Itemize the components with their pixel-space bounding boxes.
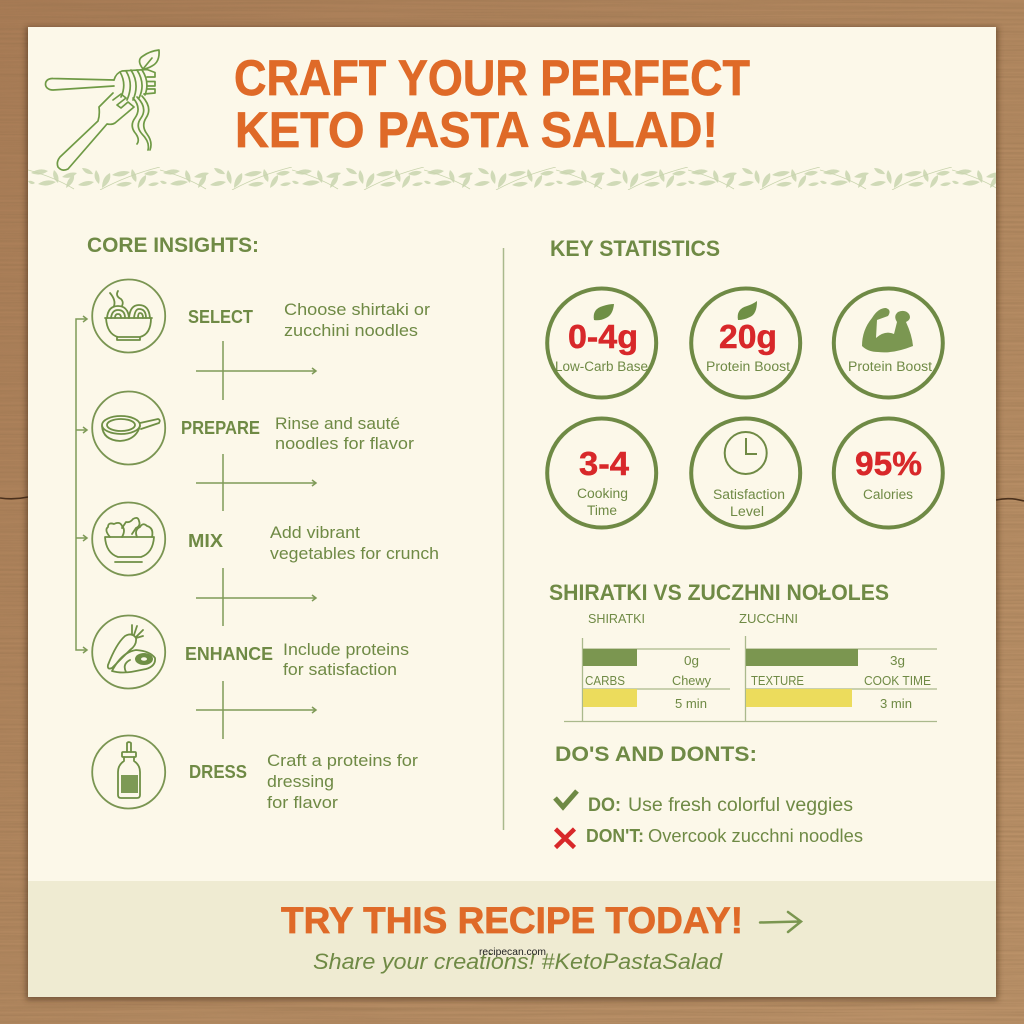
icon: noodle bowl — [92, 280, 165, 352]
icon: frying pan — [92, 392, 165, 464]
flow bracket with arrows — [76, 316, 87, 653]
stat: satisfaction level — [691, 418, 800, 528]
stat: low-carb base — [547, 288, 656, 398]
watermark: recipecan.com — [479, 947, 546, 958]
leaf pattern band — [28, 167, 996, 190]
description: dress — [267, 751, 418, 812]
icon: check — [555, 791, 577, 807]
comparison chart: CARBS — [585, 673, 625, 688]
icon: flexed arm — [862, 308, 913, 352]
icon: carrot and protein — [92, 616, 165, 688]
stat: low-carb base: 0-4g — [568, 318, 638, 355]
connector 3 — [196, 568, 316, 626]
title — [234, 50, 750, 158]
label: mix: MIX — [188, 531, 223, 551]
label: enhance: ENHANCE — [185, 644, 273, 664]
description: select — [284, 300, 430, 340]
label: prepare: PREPARE — [181, 418, 260, 438]
step: mix — [92, 502, 439, 576]
connector 2 — [196, 454, 316, 511]
stat: calories — [834, 418, 943, 528]
description: enhance: Include proteins — [283, 640, 409, 659]
comparison chart: 3g — [890, 653, 905, 668]
stat: protein boost muscle — [834, 288, 943, 398]
icon: leaf — [594, 304, 614, 320]
icon: dressing bottle — [92, 736, 165, 808]
comparison chart: 0g — [684, 653, 699, 668]
do item: DO: — [588, 795, 621, 816]
heading: dos and donts: DO'S AND DONTS: — [555, 743, 757, 766]
heading: noodle comparison: SHIRATKI VS ZUCZHNI NOŁOLES — [549, 580, 889, 605]
description: mix — [270, 523, 439, 563]
description: enhance — [283, 640, 409, 679]
comparison chart — [564, 611, 937, 722]
stat: low-carb base: Low-Carb Base — [555, 359, 648, 374]
description: dress: dressing — [267, 772, 334, 791]
title: CRAFT YOUR PERFECT — [234, 50, 750, 106]
heading: core insights: CORE INSIGHTS: — [87, 234, 259, 257]
connector 1 — [196, 341, 316, 400]
comparison chart: TEXTURE — [751, 673, 804, 688]
do item: Use fresh colorful veggies — [628, 795, 853, 816]
description: prepare: noodles for flavor — [275, 434, 414, 453]
stat: protein boost 20g: Protein Boost — [706, 359, 790, 374]
stat: protein boost 20g — [691, 288, 800, 398]
description: mix: vegetables for crunch — [270, 544, 439, 563]
comparison chart: SHIRATKI — [588, 611, 645, 626]
description: prepare — [275, 414, 414, 453]
label: select: SELECT — [188, 307, 253, 327]
stat: calories: Calories — [863, 487, 913, 502]
comparison chart: COOK TIME — [864, 673, 931, 688]
description: prepare: Rinse and sauté — [275, 414, 400, 433]
stat: protein boost 20g: 20g — [719, 318, 777, 355]
dont item: DON'T: — [586, 826, 644, 846]
description: dress: for flavor — [267, 793, 338, 812]
connector 4 — [196, 681, 316, 739]
description: mix: Add vibrant — [270, 523, 360, 542]
hashtag line: Share your creations! #KetoPastaSalad — [313, 949, 723, 974]
icon: salad bowl — [92, 502, 165, 576]
icon: arrow — [760, 912, 801, 932]
step: dress — [92, 736, 418, 812]
stat: cooking time: Cooking — [577, 486, 628, 501]
stat: cooking time: Time — [587, 503, 617, 518]
stat: protein boost muscle: Protein Boost — [848, 359, 932, 374]
comparison chart: Chewy — [672, 673, 711, 688]
do item — [555, 791, 853, 816]
label: dress: DRESS — [189, 762, 247, 782]
step: select — [92, 280, 430, 352]
stat: satisfaction level: Satisfaction — [713, 487, 785, 502]
description: enhance: for satisfaction — [283, 660, 397, 679]
dont item: Overcook zucchni noodles — [648, 826, 863, 846]
description: select: zucchini noodles — [284, 321, 418, 340]
stat: cooking time — [547, 418, 656, 528]
stat: cooking time: 3-4 — [579, 445, 630, 482]
step: enhance — [92, 616, 409, 688]
icon: fork with noodles and leaf — [46, 50, 159, 170]
stat: calories: 95% — [855, 445, 922, 482]
icon: cross — [556, 829, 574, 848]
heading: key statistics: KEY STATISTICS — [550, 236, 720, 261]
step: prepare — [92, 392, 414, 464]
description: select: Choose shirtaki or — [284, 300, 430, 319]
dont item — [556, 826, 863, 848]
stat: satisfaction level: Level — [730, 504, 764, 519]
icon: leaf — [738, 301, 757, 320]
comparison chart: 3 min — [880, 696, 912, 711]
description: dress: Craft a proteins for — [267, 751, 418, 770]
title: KETO PASTA SALAD! — [235, 102, 718, 158]
comparison chart: 5 min — [675, 696, 707, 711]
comparison chart: ZUCCHNI — [739, 611, 798, 626]
call to action: TRY THIS RECIPE TODAY! — [281, 900, 743, 941]
footer band — [28, 881, 996, 997]
icon: clock — [725, 432, 767, 474]
